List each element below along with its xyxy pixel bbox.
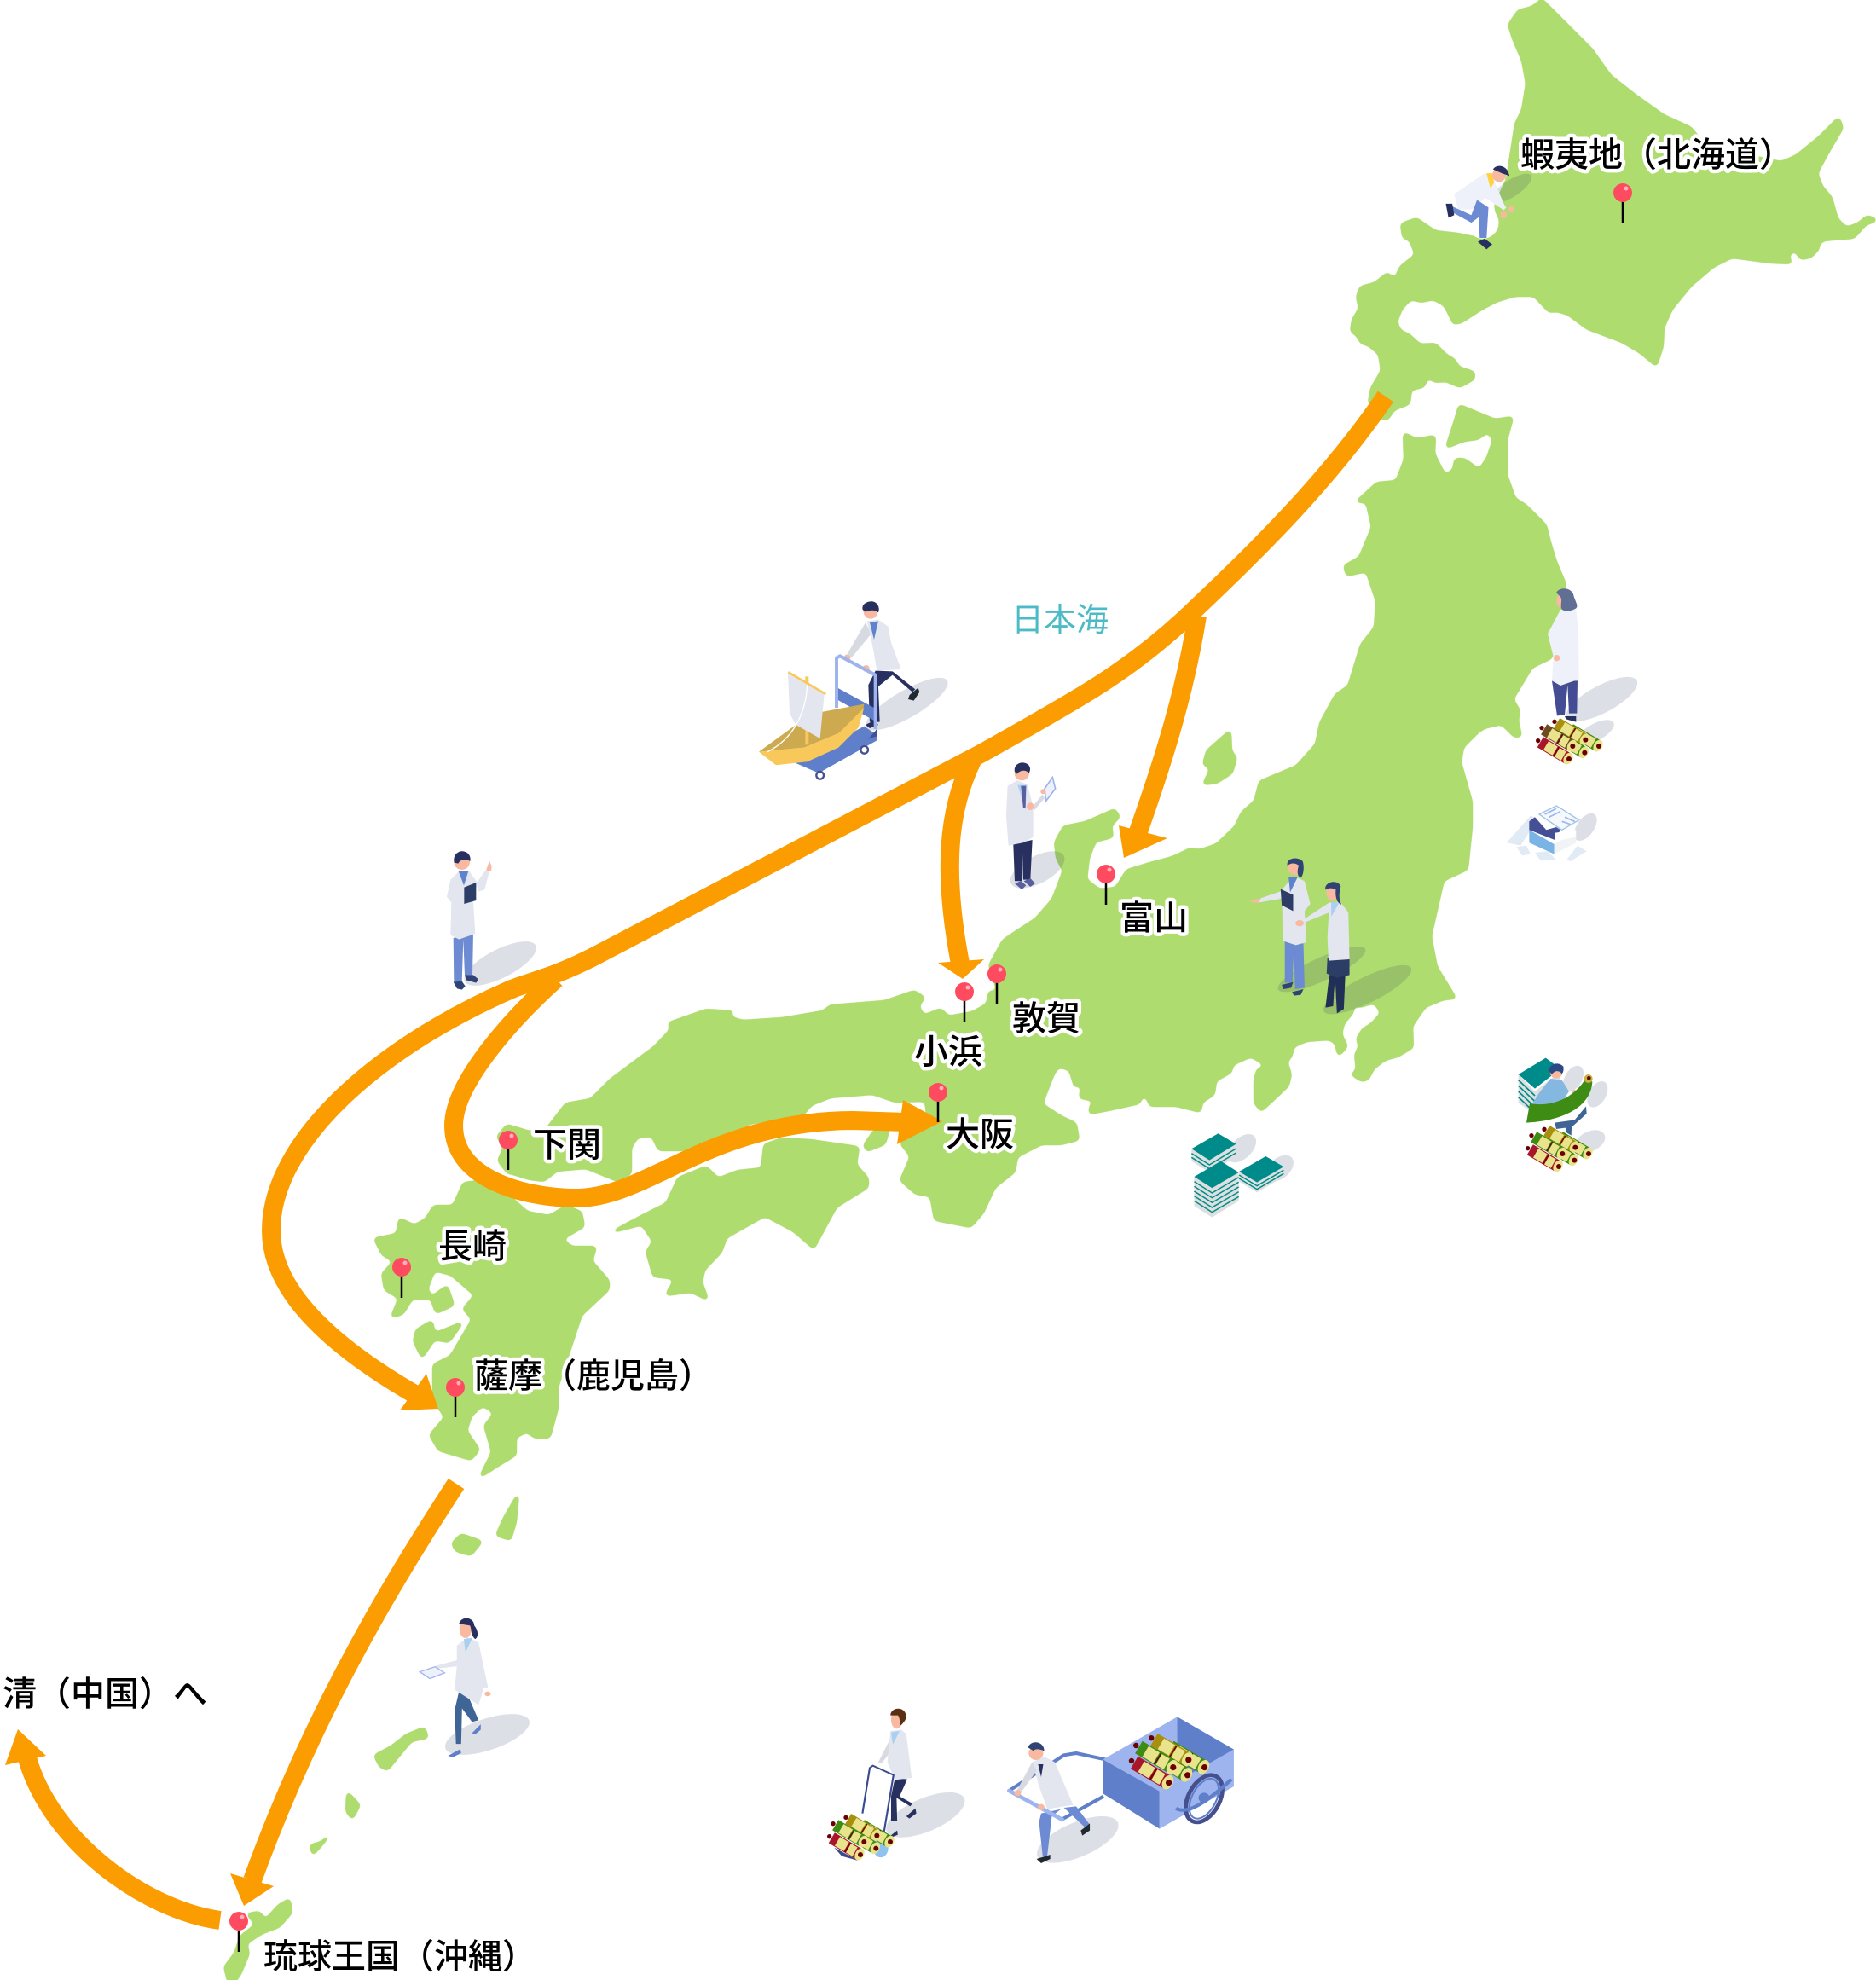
figure: rolls of kelp in cart [1129, 1735, 1212, 1792]
figure: stacks of kelp bundles [1191, 1131, 1300, 1218]
land: Hokkaido [1352, 0, 1876, 419]
arrow: Satsuma to Ryukyu [230, 1484, 456, 1906]
land: Amakusa islands [414, 1287, 461, 1357]
figure: doctor with tablet near Noto [1005, 762, 1070, 896]
land: Nansei islands [225, 1496, 518, 1980]
land: Sado island [1204, 732, 1236, 784]
pin: Satsuma [446, 1378, 465, 1417]
pin: Shimonoseki [499, 1131, 518, 1170]
figure: worker holding kelp sheet with stack [1519, 1058, 1612, 1157]
figure: doctor pointing up with clipboard [447, 851, 542, 994]
pin: Ezo [1613, 183, 1632, 223]
pin: Ryukyu [229, 1912, 248, 1952]
land: Awaji island [865, 1126, 889, 1150]
pin: Obama [955, 982, 974, 1022]
label: Obama: 小浜 [914, 1033, 982, 1071]
label: Sea of Japan: 日本海 [1011, 603, 1109, 639]
pin: Nagasaki [392, 1258, 411, 1298]
label: Toyama: 富山 [1120, 900, 1188, 937]
figure: rolls of kelp under worker [1526, 1127, 1595, 1174]
figure: two doctors in central Honshu [1249, 858, 1420, 1022]
figure: rolls of kelp on hand truck [827, 1815, 896, 1862]
label: to Qing (China): 清（中国）へ [3, 1676, 207, 1713]
arrow: Ryukyu to Qing China [5, 1729, 220, 1920]
label: Ezo (Hokkaido): 蝦夷地（北海道） [1520, 136, 1793, 174]
figure: woman with long hair on east coast [1548, 588, 1643, 749]
label: Nagasaki: 長崎 [438, 1228, 507, 1265]
arrow: Ezo west along Sea of Japan, continuing round to Satsuma [271, 397, 1386, 1410]
label: Satsuma (Kagoshima): 薩摩（鹿児島） [474, 1358, 713, 1395]
figure: rolls of kelp on east coast [1536, 720, 1605, 767]
figure: woman with hand truck of kelp [834, 1709, 971, 1861]
pin: Toyama [1097, 865, 1115, 905]
land: Shikoku [614, 1139, 867, 1299]
label: Ryukyu Kingdom (Okinawa): 琉球王国（沖縄） [263, 1938, 536, 1976]
arrow: branch to Toyama [1119, 616, 1197, 858]
pin: Tsuruga [987, 964, 1006, 1004]
land: Honshu [498, 406, 1565, 1226]
label: Osaka: 大阪 [946, 1116, 1014, 1154]
label: Tsuruga: 敦賀 [1012, 1000, 1080, 1038]
figure: doctor pushing boat on a cart [759, 601, 954, 779]
arrow: branch through Shimonoseki to Osaka [454, 979, 942, 1198]
label: Shimonoseki: 下関 [533, 1126, 601, 1164]
figure: walking woman with tablet [420, 1618, 537, 1763]
figure: doctor crouching in Hokkaido [1446, 166, 1536, 249]
arrow: branch to Obama [938, 761, 984, 979]
figure: doctor pulling cart of kelp [1009, 1717, 1234, 1873]
pin: Osaka [929, 1083, 947, 1122]
figure: books and papers [1507, 806, 1601, 861]
land: Kyushu [375, 1178, 608, 1476]
